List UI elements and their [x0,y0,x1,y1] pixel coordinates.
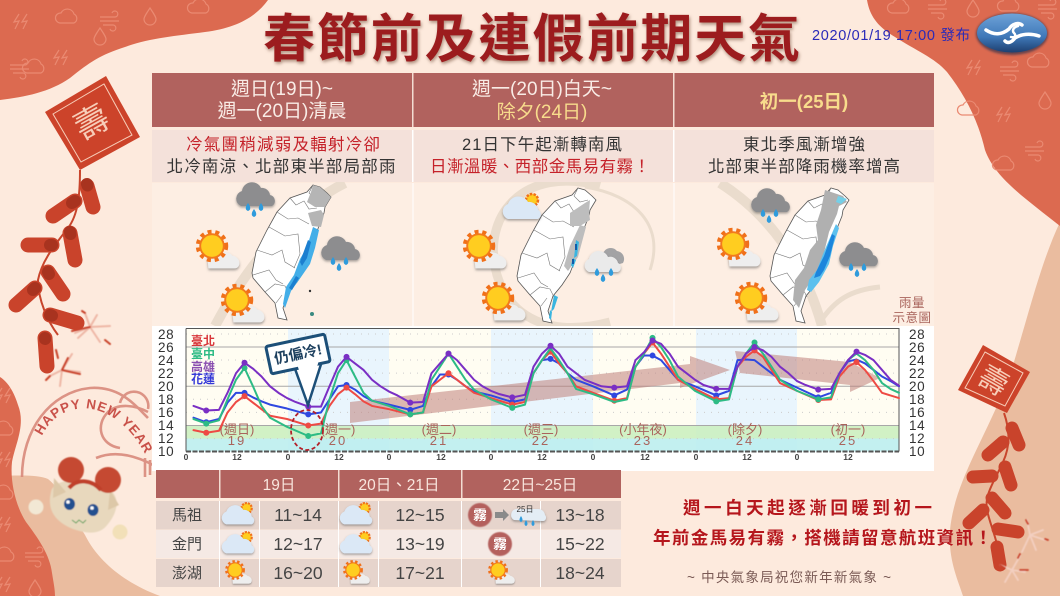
day labels: 20 [329,433,347,448]
header 2: 週一(20日)白天~ [472,78,612,100]
left axis labels: 26 [158,340,174,355]
left axis labels: 16 [158,405,174,420]
summary text [653,498,992,548]
map: Sunday rainfall [252,185,331,320]
lucky diamond charm: right: 壽 [972,360,1014,403]
icon: rain cloud east [321,236,360,271]
day labels [220,422,865,448]
x axis labels: 12 [640,452,650,462]
icon: arrow to 25th [495,509,509,521]
day labels: (週一) [321,422,355,437]
x axis labels: 12 [436,452,446,462]
description 2: 日漸溫暖、西部金馬易有霧！ [430,157,650,176]
x axis labels: 12 [232,452,242,462]
left axis labels: 10 [158,444,174,459]
series: Hualien [194,356,899,422]
right axis labels: 14 [909,418,925,433]
x axis labels: 0 [489,452,494,462]
description 2: 21日下午起漸轉南風 [462,135,622,154]
icon: rain cloud east [839,242,878,277]
description 3: 北部東半部降雨機率增高 [708,157,900,176]
right axis labels: 18 [909,392,925,407]
icon: rain cloud north [236,182,275,217]
tan background shape: right [950,222,1060,596]
day labels: (初一) [831,422,865,437]
right axis labels: 26 [909,340,925,355]
warming trend arrow: 21 to 23 [350,356,730,423]
icon: rain cloud with date [511,505,546,526]
day labels: 23 [634,433,652,448]
happy new year brush arc [22,388,155,477]
series: Kaohsiung [194,341,899,410]
left axis labels: 18 [158,392,174,407]
firework burst: left lower [46,350,80,386]
icon: sun south [484,284,525,320]
description 1: 冷氣團稍減弱及輻射冷卻 [186,135,380,154]
x axis labels: 0 [795,452,800,462]
red blob: top left [0,0,268,100]
dashed circle highlight [291,410,323,450]
header 1: 週一(20日)清晨 [218,100,346,122]
x axis labels: 0 [184,452,189,462]
x axis labels: 0 [694,452,699,462]
x axis labels: 0 [286,452,291,462]
map: Monday to Friday rainfall [517,188,596,323]
right axis labels: 24 [909,353,925,368]
chart grid [186,328,899,452]
chart legend: 高雄 [191,359,215,374]
summary text: 週一白天起逐漸回暖到初一 [683,498,932,518]
row: Matsu [172,503,605,527]
table row backgrounds [156,501,621,587]
firecracker string: left [16,170,93,366]
day labels: (週三) [524,422,558,437]
table header: 22日~25日 [503,477,577,494]
chart legend: 臺中 [191,346,215,361]
mascot: rat [28,457,128,540]
description 1: 北冷南涼、北部東半部局部雨 [166,157,396,176]
table: outlying islands [156,470,621,587]
panel: forecast map background [152,183,934,326]
lucky diamond charm: left [45,76,140,170]
right axis labels: 16 [909,405,925,420]
red blob: top right [867,0,1060,226]
table header: 19日 [263,477,295,494]
icon: sun south [223,286,264,322]
firework burst: left upper [72,311,110,344]
x axis labels: 12 [843,452,853,462]
row: Matsu: 12~15 [395,505,445,525]
icon: cloud with sun north [503,194,541,219]
icon: sun south [737,284,778,320]
firecracker string: right [969,413,1019,565]
icon: fog [468,503,492,527]
closing greeting: ~ 中央氣象局祝您新年新氣象 ~ [687,569,891,585]
summary text: 年前金馬易有霧，搭機請留意航班資訊！ [653,528,992,548]
chart: temperature trend [152,326,934,471]
decorative brush rings behind maps [215,181,880,327]
lucky diamond charm: left: 壽 [68,98,116,148]
x axis labels: 0 [591,452,596,462]
row: Kinmen: 13~19 [395,534,445,554]
icon: sun west [198,232,239,268]
description 3: 東北季風漸增強 [743,135,865,154]
x axis labels: 12 [742,452,752,462]
red blob: bottom left [0,377,55,596]
chart legend: 花蓮 [191,371,215,386]
series: Taichung [194,338,899,436]
x axis labels: 12 [537,452,547,462]
left axis labels: 14 [158,418,174,433]
icon: agency logo [976,13,1048,55]
panel: header row [152,73,934,127]
day labels: (小年夜) [619,422,667,437]
right axis labels: 22 [909,366,925,381]
row: Penghu: 16~20 [273,563,323,583]
left axis labels: 22 [158,366,174,381]
row: Kinmen: 12~17 [273,534,323,554]
left axis labels: 12 [158,431,174,446]
row: Penghu: 17~21 [395,563,445,583]
left axis labels: 24 [158,353,174,368]
table header [156,470,621,498]
header 1: 週日(19日)~ [231,78,333,100]
tan background shape: bottom left [0,475,160,596]
map: Lunar New Year day rainfall [770,188,849,323]
icon: rain cloud with date: 25日 [517,505,533,514]
right axis labels: 20 [909,379,925,394]
icon: fog: 霧 [473,508,487,523]
header 2: 除夕(24日) [497,101,587,123]
row: Kinmen: 15~22 [555,534,605,554]
right axis labels: 12 [909,431,925,446]
title: 春節前及連假前期天氣 [263,11,800,69]
row: Penghu: 澎湖 [172,565,202,582]
day labels: 19 [228,433,246,448]
row: Matsu: 13~18 [555,505,605,525]
icon: fog: 霧 [493,537,507,552]
rainfall schematic label: 雨量 [899,296,925,310]
callout: still cold: 仍偏冷! [272,340,324,368]
day labels: 22 [532,433,550,448]
firework bursts: right [1000,520,1048,582]
icon: sun west [465,232,506,268]
chart legend: 臺北 [191,334,215,348]
row: Matsu: 11~14 [274,505,322,525]
day labels: (週二) [422,422,456,437]
header 3: 初一(25日) [760,91,848,112]
day labels: (週日) [220,422,254,437]
table header: 20日、21日 [359,477,439,494]
day labels: (除夕) [728,422,762,437]
rainfall schematic label: 示意圖 [892,310,932,325]
x axis labels: 12 [334,452,344,462]
row: Penghu [172,562,605,584]
row: Penghu: 18~24 [555,563,605,583]
icon: fog [488,532,512,556]
chart day bands [186,329,899,452]
row: Kinmen [172,532,605,556]
day labels: 24 [736,433,754,448]
publish date: 2020/01/19 17:00 發布 [812,27,970,44]
x axis labels: 0 [387,452,392,462]
row: Kinmen: 金門 [172,536,202,553]
line series [194,338,899,436]
left axis labels: 28 [158,327,174,342]
right axis labels: 10 [909,444,925,459]
warming trend arrow: 24 to 25 [735,351,880,392]
chart legend [191,334,215,386]
icon: light rain east [585,248,624,282]
panel: description row [152,130,934,182]
day labels: 25 [839,433,857,448]
icon: rain cloud north [751,188,790,223]
callout: still cold [266,334,330,405]
right axis labels: 28 [909,327,925,342]
icon: sun west [719,230,760,266]
lucky diamond charm: right [958,345,1030,413]
happy new year text: HAPPY NEW YEAR [34,399,152,454]
series: Taipei [194,342,899,433]
day labels: 21 [430,433,448,448]
row: Matsu: 馬祖 [172,507,202,524]
left axis labels: 20 [158,379,174,394]
